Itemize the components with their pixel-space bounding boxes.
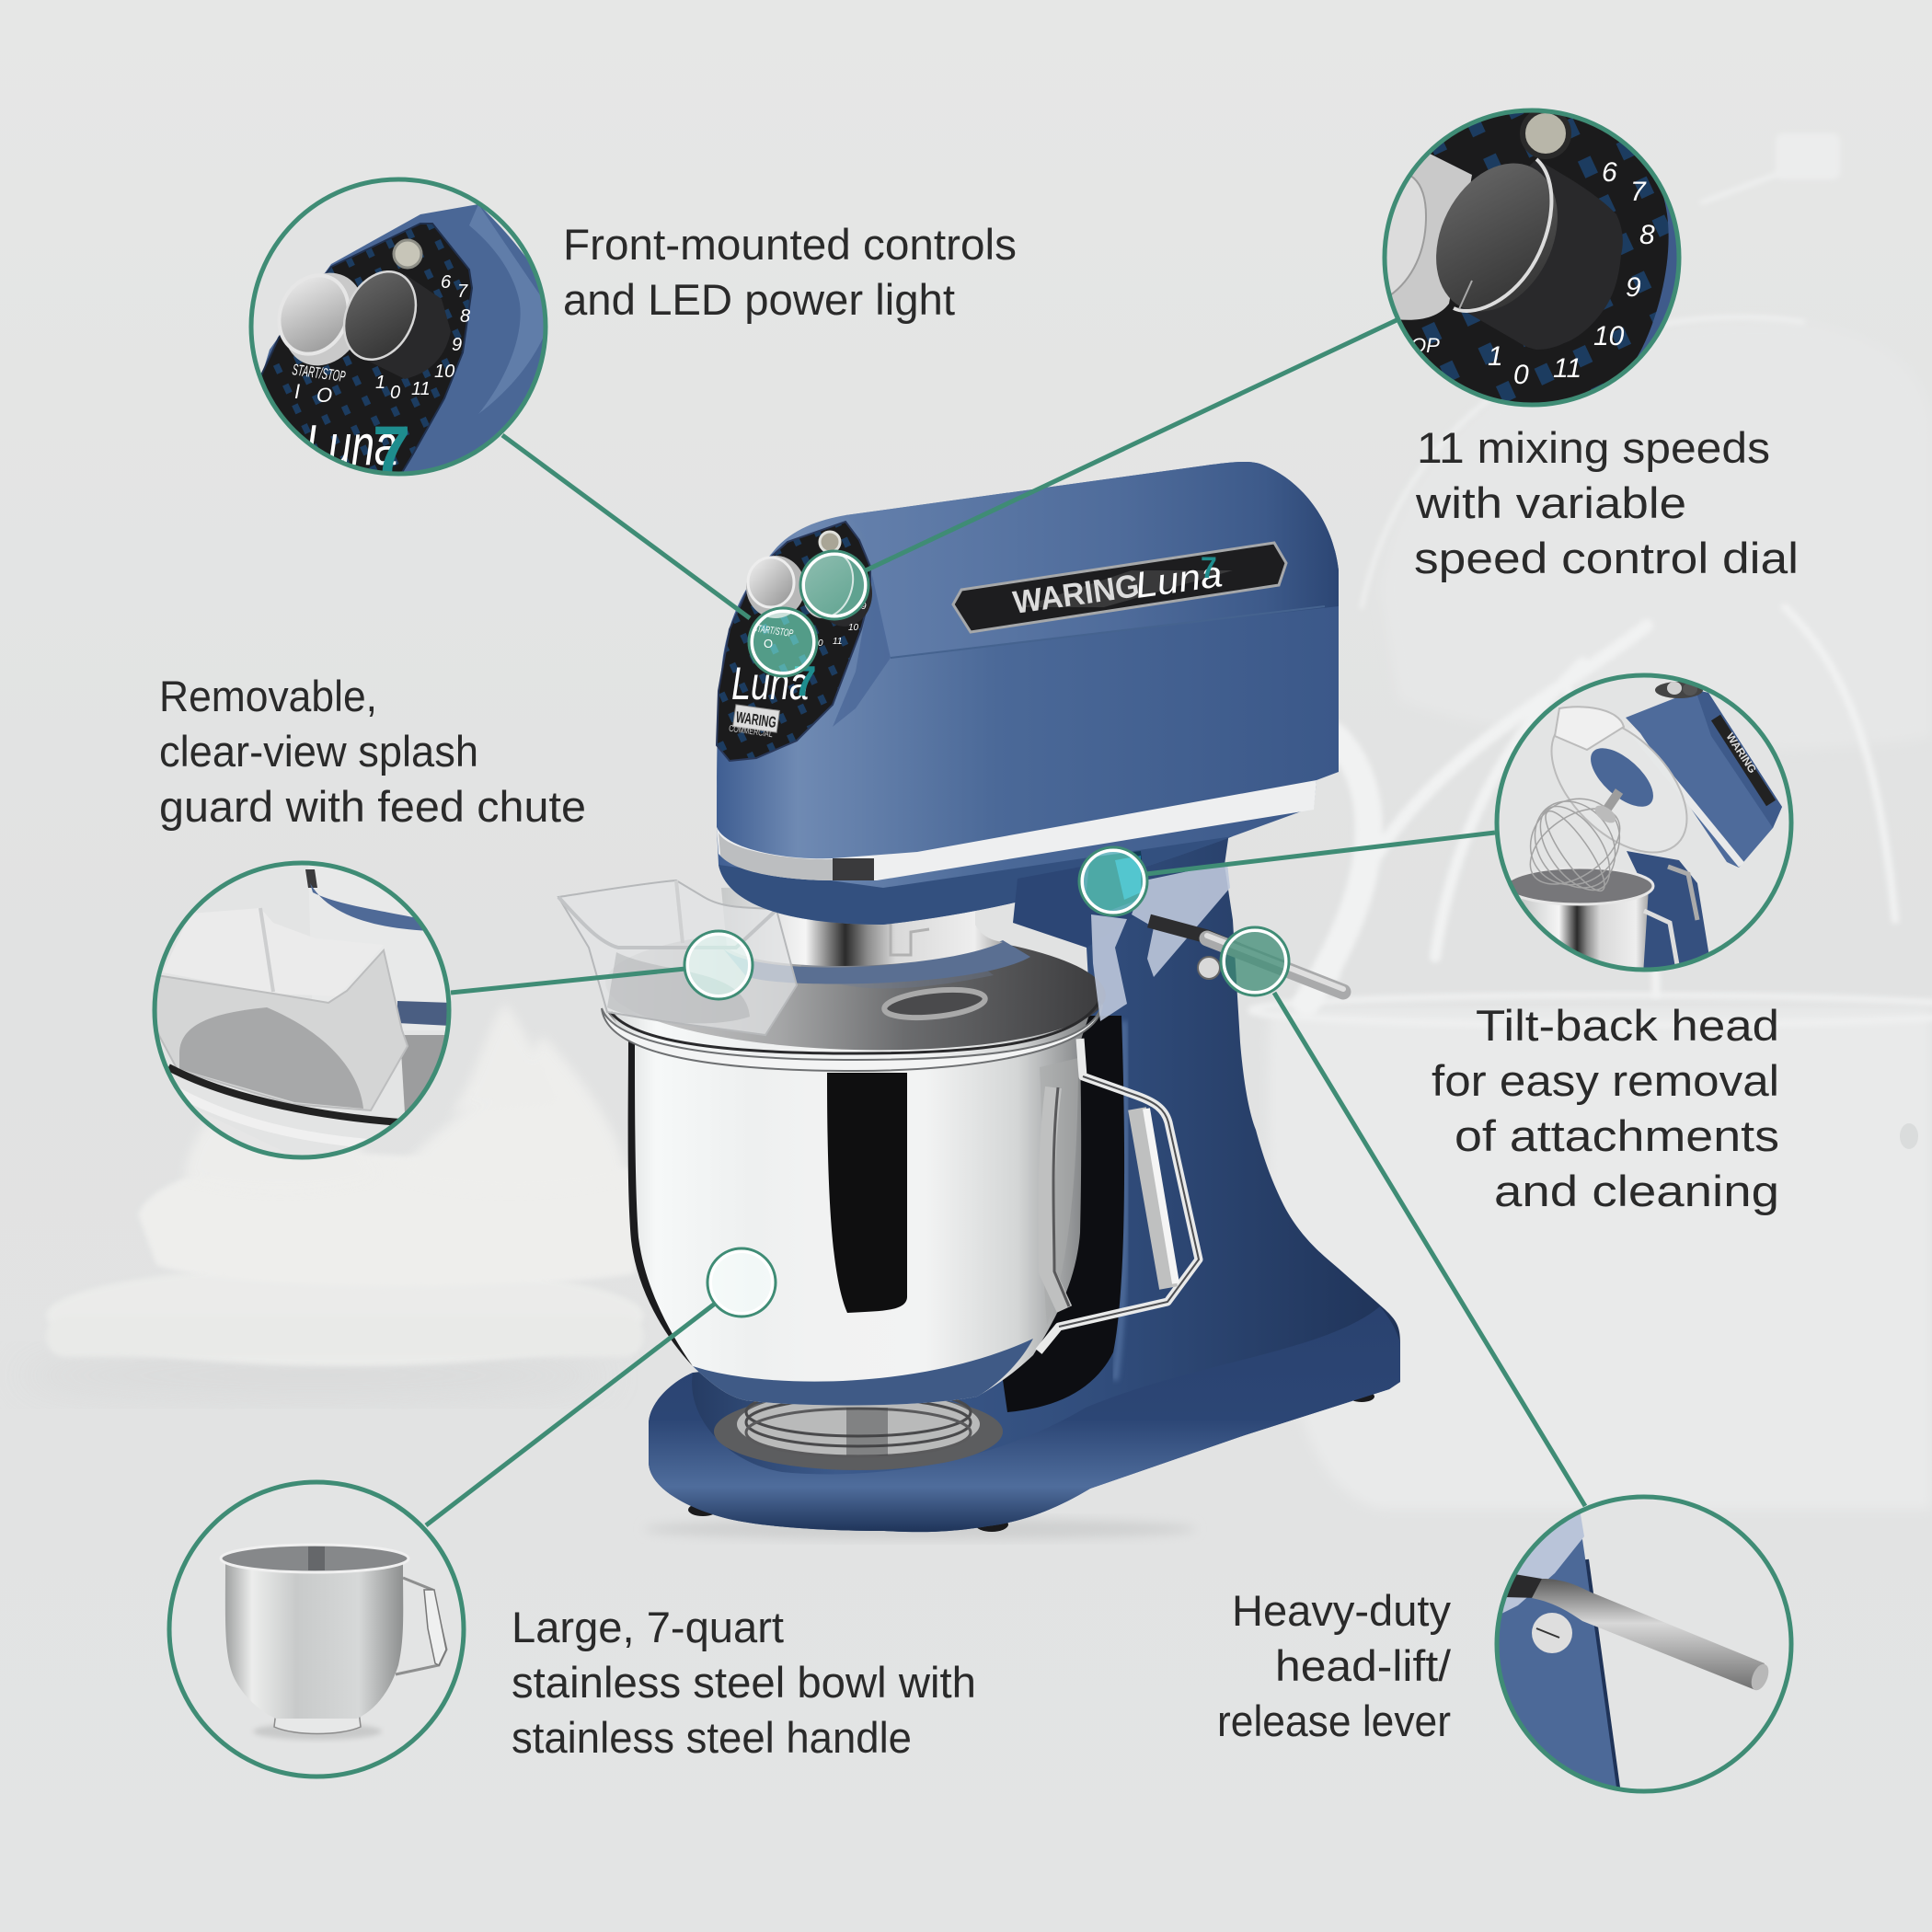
callout circle: splash guard <box>155 863 451 1161</box>
panel labels: 10 <box>848 623 859 633</box>
faded cake on stand background photo <box>18 1003 644 1399</box>
callout circle: front controls: 0 <box>390 383 400 403</box>
marker: controls <box>749 608 817 676</box>
mini head <box>1626 690 1782 868</box>
caption: head-lift lever: head-lift/ <box>1275 1641 1452 1690</box>
attachment hub chrome <box>721 881 1030 984</box>
panel Waring badge: WARING <box>735 708 777 731</box>
splash guard lid <box>604 922 1108 1056</box>
panel labels: 0 <box>818 638 823 649</box>
marker: feed chute <box>684 931 753 999</box>
callout circle: front controls <box>248 177 548 477</box>
marker: speed dial <box>800 551 868 619</box>
nameplate: WARING <box>1011 568 1142 621</box>
faded mixer background photo <box>1251 133 1932 1509</box>
marker: tilt head <box>1079 847 1147 915</box>
panel Waring badge <box>728 705 779 740</box>
mixer column and base <box>649 833 1400 1532</box>
caption: tilt-back head: for easy removal <box>1432 1056 1779 1105</box>
mini whisk <box>1529 799 1621 892</box>
callout circle: speed dial: 6 <box>1602 157 1617 188</box>
caption: head-lift lever: Heavy-duty <box>1232 1586 1451 1635</box>
callout circle: front controls: I <box>294 380 300 403</box>
bowl blue reflection <box>693 1339 1033 1406</box>
callout circle: speed dial: 11 <box>1553 353 1581 384</box>
panel labels: 11 <box>833 637 842 647</box>
caption: mixing speeds: speed control dial <box>1414 534 1799 582</box>
callout circle: tilt-back head <box>1497 675 1791 975</box>
callout circle: lever <box>1481 1497 1791 1794</box>
callout circle: front controls: 8 <box>460 306 470 327</box>
mixer head <box>717 462 1339 925</box>
tilt head blue latch <box>1013 851 1150 948</box>
caption: mixing speeds <box>1414 423 1799 582</box>
caption: tilt-back head: of attachments <box>1455 1111 1779 1160</box>
caption: splash guard: clear-view splash <box>159 727 478 776</box>
mini guard <box>1551 728 1687 854</box>
panel Waring badge: COMMERCIAL <box>728 724 774 740</box>
callout circle: bowl <box>169 1482 464 1777</box>
panel labels: O <box>764 637 773 650</box>
callout circle: front controls: O <box>316 384 332 407</box>
mixer soft shadow <box>644 1518 1196 1540</box>
callout circle: front controls: 7 <box>373 412 410 489</box>
white trim band <box>717 780 1317 880</box>
caption: splash guard: Removable, <box>159 672 377 720</box>
caption: front-mounted controls: and LED power light <box>563 275 955 324</box>
caption: mixing speeds: 11 mixing speeds <box>1417 423 1770 472</box>
caption: bowl: stainless steel handle <box>512 1713 912 1762</box>
panel labels: Luna <box>731 658 809 709</box>
bowl rim <box>602 1005 1102 1071</box>
callout circle: front controls: 1 <box>375 373 385 393</box>
bowl dark reflection <box>827 1073 907 1313</box>
caption: bowl: Large, 7-quart <box>512 1603 784 1651</box>
start stop button <box>746 556 805 618</box>
speed dial knob <box>795 546 872 627</box>
head lift lever <box>1149 921 1343 992</box>
callout circle: front controls: 6 <box>441 272 452 293</box>
callout circle: speed dial: OP <box>1410 334 1440 357</box>
mini column <box>1627 851 1709 975</box>
mini lever and handle <box>1668 867 1697 920</box>
callout circle: speed dial: 0 <box>1513 360 1529 390</box>
bowl pedestal <box>714 1388 1003 1470</box>
clear feed chute <box>558 880 797 1035</box>
caption: front-mounted controls <box>563 220 1017 324</box>
caption: tilt-back head <box>1432 1001 1779 1215</box>
callout circle: speed dial: 10 <box>1593 321 1625 351</box>
callout circle: speed dial: 8 <box>1639 220 1655 250</box>
base platform <box>649 1306 1400 1532</box>
marker: bowl <box>707 1248 776 1317</box>
LED power light <box>820 532 840 552</box>
caption: bowl <box>512 1603 976 1762</box>
callout circle: tilt-back head: WARING <box>1723 730 1759 776</box>
caption: tilt-back head: and cleaning <box>1494 1167 1779 1215</box>
callout circle: front controls: 10 <box>434 362 454 382</box>
bowl handle <box>1039 1039 1199 1351</box>
callout circle: speed dial <box>1385 110 1693 405</box>
callout circle: speed dial: 9 <box>1626 272 1641 303</box>
panel labels: 9 <box>861 602 867 612</box>
clear bracket <box>1091 863 1230 1021</box>
callout circle: front controls: START/STOP <box>291 361 347 385</box>
mini bowl <box>1522 894 1649 968</box>
main product: stand mixer <box>558 462 1400 1540</box>
nameplate <box>953 543 1286 632</box>
callout circle: front controls: 9 <box>452 335 462 355</box>
leader lines <box>426 320 1585 1525</box>
caption: head-lift lever: release lever <box>1217 1696 1451 1745</box>
caption: tilt-back head: Tilt-back head <box>1476 1001 1779 1050</box>
callout circle: speed dial: 1 <box>1488 341 1503 372</box>
panel labels <box>731 602 867 709</box>
callout circle: front controls: 11 <box>411 379 431 399</box>
panel teal seven: 7 <box>793 657 817 705</box>
nameplate: 7 <box>1201 551 1217 584</box>
caption: head-lift lever <box>1217 1586 1452 1745</box>
caption: front-mounted controls: Front-mounted controls <box>563 220 1017 269</box>
marker: lever <box>1221 927 1289 995</box>
panel labels: START/STOP <box>753 623 794 639</box>
stainless steel bowl <box>607 1012 1090 1406</box>
callout circle: front controls: Luna <box>305 414 397 477</box>
caption: splash guard <box>159 672 586 831</box>
mixer feet <box>688 1391 1374 1532</box>
control panel <box>717 522 870 761</box>
nameplate: Luna <box>1133 554 1225 606</box>
caption: mixing speeds: with variable <box>1415 478 1686 527</box>
callout circle: speed dial: 7 <box>1630 177 1647 207</box>
caption: bowl: stainless steel bowl with <box>512 1658 976 1707</box>
callout circle: front controls: 7 <box>457 282 468 302</box>
caption: splash guard: guard with feed chute <box>159 782 586 831</box>
head upper facet <box>845 462 1339 658</box>
